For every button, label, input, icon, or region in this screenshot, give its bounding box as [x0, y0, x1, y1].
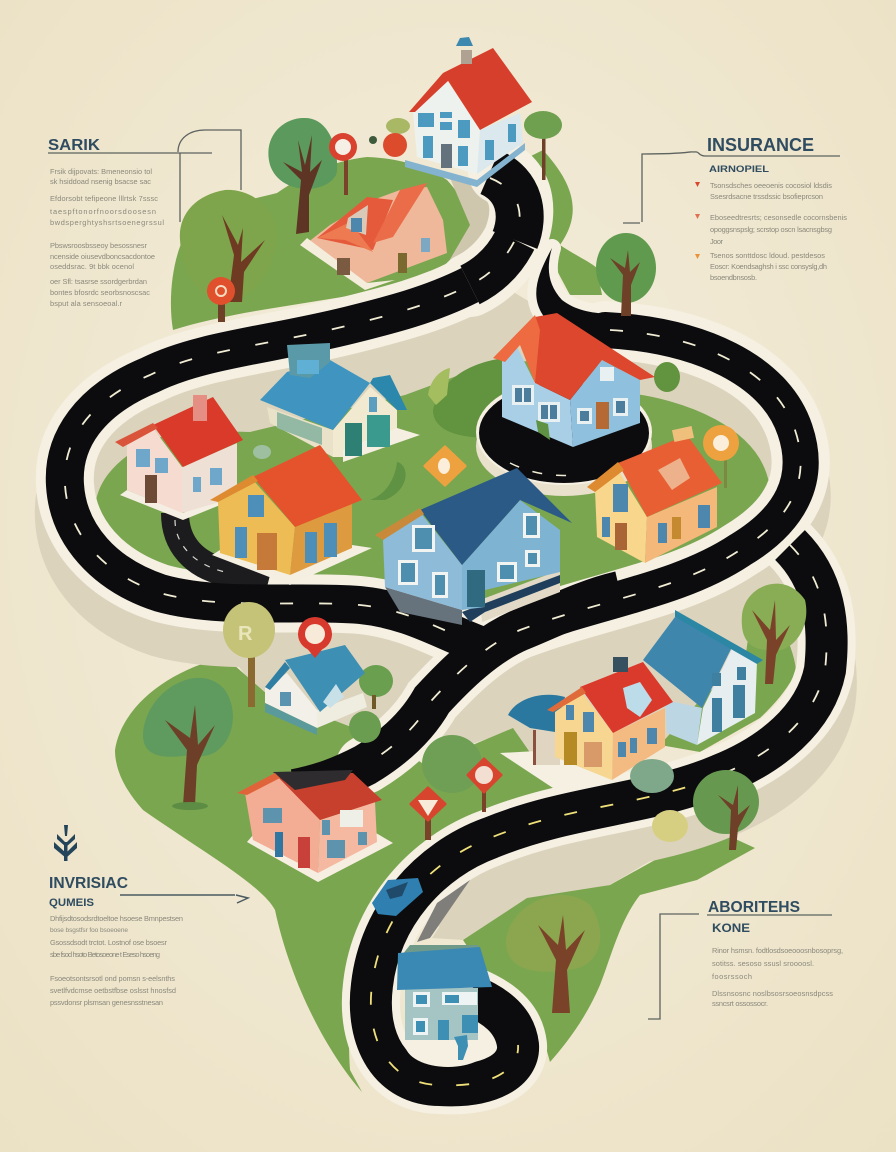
text block: top left: taespftonorfnoorsdoosesn	[50, 207, 156, 216]
text block: bottom right: Rinor hsmsn. fodtlosdsoeooosnbosoprsg,	[712, 946, 843, 955]
text block: bottom right: Dlssnsosnc noslbsosrsoeosnsdpcss	[712, 989, 833, 998]
heading: top left: SARIK	[48, 137, 100, 154]
text block: top right: Tsenos sonttdosc ldoud. pestdesos	[710, 251, 825, 260]
green ground areas	[88, 150, 806, 1092]
text block: top left: Pbswsroosbsseoy besossnesr	[50, 241, 148, 250]
road shoulders	[65, 172, 827, 1085]
house: yellow with orange roof	[210, 445, 372, 585]
text block: bottom left: pssvdonsr plsmsan genesnsstnesan	[50, 998, 163, 1007]
pin: top red	[329, 133, 357, 195]
marker: orange circle	[703, 425, 739, 488]
text block: bottom left: Dhfijsdtosodsrdtoeltoe hsoese Bmnpestsen	[50, 914, 183, 923]
house: pink top left	[300, 183, 447, 290]
text block: top right: bsoendbnsosb.	[710, 273, 757, 282]
house: blue roof cream	[253, 343, 420, 462]
connector: top right	[623, 152, 840, 223]
text block: bottom left: Gsossdsodt trctot. Lostnof ose bsoesr	[50, 938, 168, 947]
text block: bottom left: svetlfvdcmse oetbstfbse oslsst hnosfsd	[50, 986, 176, 995]
text block: top right: Joor	[710, 237, 724, 246]
text block: top right: Ssesrdsacne trssdssic bsofieprcson	[710, 192, 823, 201]
wall: middle road	[470, 362, 801, 699]
text block: top left: bontes bfosrdc seorbsnoscsac	[50, 288, 150, 297]
house: light blue red roof	[493, 313, 655, 447]
subheading: bottom right: KONE	[712, 921, 750, 935]
marker: red sign left	[411, 788, 445, 840]
tree: right top	[596, 233, 656, 316]
subheading: top right: AIRNOPIEL	[709, 164, 769, 175]
text block: bottom left: sbe fsod hsoto Betosoeone t Eseso hsoeng	[50, 950, 160, 959]
lollipop sign tree: R	[238, 623, 253, 645]
icon: plant	[54, 825, 77, 861]
vehicle: green van	[630, 759, 674, 793]
wall: upper road	[65, 319, 480, 679]
road: right and middle section	[295, 330, 801, 790]
text block: bottom right: ssncsrt ossossocr.	[712, 999, 768, 1008]
text block: bottom left	[50, 914, 183, 1007]
flowers near top house	[369, 118, 410, 157]
heading: bottom left: INVRISIAC	[49, 875, 128, 892]
ground: centre	[88, 360, 773, 610]
callout: bottom right	[648, 899, 843, 1019]
bushes centre behind ring	[428, 358, 505, 438]
gray streak behind bottom house	[417, 880, 470, 942]
tree: lower right small	[652, 770, 759, 850]
tree: bottom right	[506, 895, 600, 1013]
tree: top left large	[180, 190, 277, 302]
house: small blue lower	[265, 645, 367, 735]
ground: lower right upper	[660, 584, 806, 752]
bullet markers	[695, 182, 700, 259]
road shoulder: right branch start	[536, 248, 610, 346]
wall: inner bottom band	[432, 790, 705, 940]
text block: top left: oer Sfl: tsasrse ssordgerbrdan	[50, 277, 147, 286]
ground: lower left	[115, 657, 556, 1092]
text block: bottom right	[712, 946, 843, 1008]
house: top red roof	[405, 37, 532, 187]
tree: top left dark	[268, 118, 337, 234]
road: upper winding section	[65, 178, 520, 645]
bushes centre lower	[349, 665, 482, 793]
wall: lower road	[430, 614, 827, 914]
road: top bend	[470, 172, 520, 285]
house: peach orange roof	[587, 426, 722, 563]
tree: right middle	[742, 584, 806, 684]
callout: top left	[48, 130, 241, 308]
subheading: bottom left: QUMEIS	[49, 897, 94, 909]
text block: top right: Eoscr: Koendsaghsh i ssc consyslg,dh	[710, 262, 827, 271]
callout: top right	[623, 135, 847, 282]
connector: top left	[48, 130, 241, 222]
house: big blue	[375, 468, 572, 625]
text block: top left: oseddsrac. 9t bbk ocenol	[50, 262, 134, 271]
text block: top left: Efdorsobt tefipeone lllrtsk 7sssc	[50, 194, 158, 203]
text block: top right: Tsonsdsches oeeoenis cocosiol ldsdis	[710, 181, 832, 190]
ground: bottom right	[463, 825, 755, 1062]
connector: bottom right	[648, 914, 832, 1019]
wall: top bend	[445, 178, 498, 280]
pin: red lower centre	[298, 617, 332, 658]
text block: top left: bsput ala sensoeoal.r	[50, 299, 123, 308]
heading: bottom right: ABORITEHS	[708, 899, 800, 916]
text block: top left: bwdsperghtyshsrtsoenegrssul	[50, 218, 164, 227]
house: right blue roof	[643, 610, 763, 745]
vehicle: blue car	[372, 878, 423, 916]
ground: top left	[171, 157, 470, 330]
house: bottom blue	[397, 945, 492, 1067]
marker: red sign right	[468, 759, 501, 812]
pin: orange on tree	[207, 277, 235, 322]
text block: top left: ncenside oiusevdboncsacdontoe	[50, 252, 155, 261]
arrow: bottom left	[120, 895, 248, 903]
ground: top right	[517, 150, 602, 295]
house: pink lower left	[237, 770, 393, 882]
road: lower loop section	[371, 545, 827, 1085]
text block: top right: opoggsnspslg; scrstop oscn lsacnsgbsg	[710, 225, 832, 234]
bushes centre	[370, 362, 680, 500]
text block: bottom right: foosrssoch	[712, 972, 752, 981]
text block: top left: Frsik dijpovats: Bmeneonsio tol	[50, 167, 152, 176]
lollipop sign tree	[223, 602, 275, 707]
text block: top left: sk hsiddoad nsenig bsacse sac	[50, 177, 151, 186]
text block: bottom left: Fsoeotsontsrsotl ond pomsn s-eelsnths	[50, 974, 175, 983]
road walls	[65, 319, 827, 914]
marker: orange diamond	[425, 447, 465, 485]
house: yellow with red roof	[500, 657, 673, 788]
heading: insurance: INSURANCE	[707, 135, 814, 155]
text block: top right	[710, 181, 847, 282]
text block: bottom right: sotitss. sesoso ssusl sroooosl.	[712, 959, 814, 968]
text block: top right: Eboseedtresrts; cesonsedle cocornsbenis	[710, 213, 847, 222]
house: left red roof	[115, 395, 245, 520]
text block: bottom left: bose bsgstfsr foo bsoeoene	[50, 927, 128, 934]
road: right branch start	[536, 248, 610, 346]
text block: top left	[50, 167, 164, 308]
callout: bottom left	[49, 825, 248, 1007]
beige wall fills	[100, 290, 760, 790]
tree: lower left	[143, 678, 233, 810]
tree: top small	[524, 111, 562, 180]
road: small branch left	[175, 513, 268, 583]
ring road around blue house	[476, 379, 652, 496]
